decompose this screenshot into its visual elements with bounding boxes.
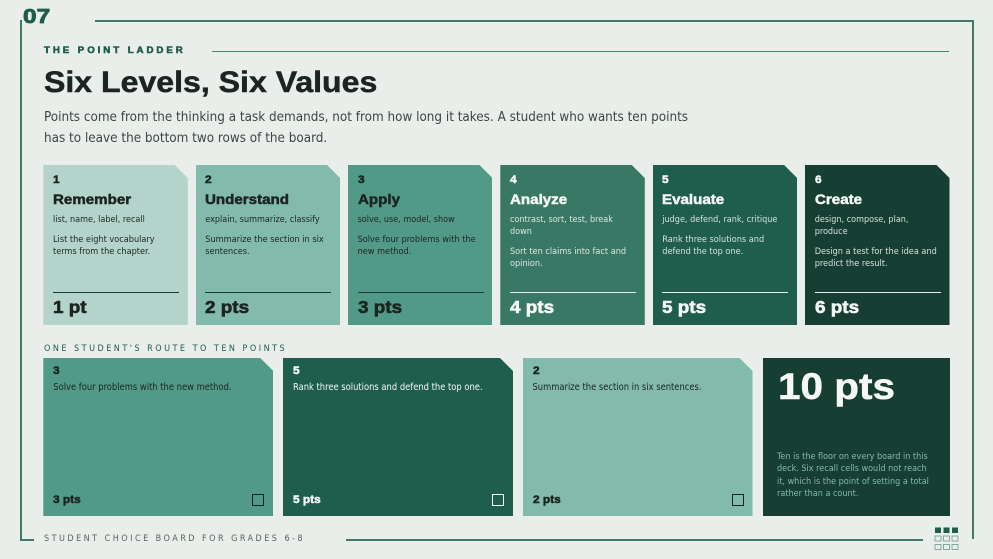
route card: level 2: Summarize the section in six sentences. [532,382,702,393]
panel: level 2 understand: explain, summarize, classify [205,215,320,225]
panel: level 3 apply [348,165,492,325]
route card: level 3: 3 pts [53,494,81,506]
panel: level 2 understand [196,165,340,325]
panel: level 4 analyze: contrast, sort, test, break [510,215,613,225]
panel: level 1 remember: Remember [53,191,131,207]
panel: level 4 analyze: down [510,227,532,237]
panel: level 1 remember: List the eight vocabulary [53,234,155,244]
total note: deck. Six recall cells would not reach [777,464,927,474]
total note: it, which is the point of setting a total [777,477,929,487]
panel: level 4 analyze: 4 pts [510,297,554,317]
total note: Ten is the floor on every board in this [777,452,928,462]
panel: level 1 remember: terms from the chapter. [53,247,150,257]
panel: level 2 understand: Understand [205,191,289,207]
icon: grid [934,528,958,550]
panel: level 6 create: Create [815,191,862,207]
total panel [763,358,950,516]
panel: level 3 apply: 3 [358,174,364,186]
route card: level 5: 5 [293,365,300,377]
total value: 10 pts [778,365,895,407]
route card: level 2: 2 pts [532,494,560,506]
footer text: STUDENT CHOICE BOARD FOR GRADES 6-8 [44,534,305,544]
panel: level 1 remember [43,165,188,325]
section label: ONE STUDENT'S ROUTE TO TEN POINTS [44,344,287,354]
route card: level 5: Rank three solutions and defend the top one. [293,382,483,393]
route card: level 3: Solve four problems with the new method. [53,382,232,393]
page number: 07 [23,6,50,28]
panel: level 4 analyze: opinion. [510,259,543,269]
route card: level 3 [43,358,273,516]
intro text: has to leave the bottom two rows of the board. [44,131,327,146]
panel: level 2 understand: Summarize the section in six [205,234,324,244]
panel: level 4 analyze [500,165,645,325]
route card: level 5: 5 pts [293,494,321,506]
panel: level 2 understand: 2 pts [205,297,249,317]
panel: level 1 remember: 1 pt [53,297,87,317]
route card: level 2: 2 [532,365,539,377]
panel: level 1 remember: list, name, label, recall [53,215,145,225]
panel: level 4 analyze: 4 [510,174,517,186]
panel: level 6 create: 6 pts [815,297,859,317]
total note: rather than a count. [777,489,858,499]
panel: level 6 create: Design a test for the idea and [815,247,937,257]
panel: level 3 apply: 3 pts [358,297,402,317]
panel: level 6 create: design, compose, plan, [815,215,908,225]
route card: level 2 [522,358,752,516]
panel: level 6 create: produce [815,227,848,237]
panel: level 2 understand: 2 [205,174,212,186]
eyebrow: THE POINT LADDER [44,45,186,55]
panel: level 5 evaluate: 5 [662,174,669,186]
panel: level 5 evaluate: Evaluate [662,191,724,207]
panel: level 3 apply: Solve four problems with the [358,234,476,244]
panel: level 5 evaluate: 5 pts [662,297,706,317]
panel: level 4 analyze: Sort ten claims into fact and [510,247,626,257]
title: Six Levels, Six Values [44,66,377,99]
total note [777,452,929,499]
panel: level 3 apply: solve, use, model, show [358,215,455,225]
intro text: Points come from the thinking a task demands, not from how long it takes. A student who wants ten points [44,110,688,125]
panel: level 5 evaluate: Rank three solutions and [662,234,764,244]
panel: level 4 analyze: Analyze [510,191,567,207]
panel: level 6 create [805,165,950,325]
panel: level 3 apply: Apply [358,191,400,207]
panel: level 6 create: 6 [815,174,821,186]
panel: level 5 evaluate: judge, defend, rank, critique [662,215,777,225]
panel: level 3 apply: new method. [358,247,411,257]
panel: level 6 create: predict the result. [815,259,888,269]
intro text [44,110,688,146]
route card: level 5 [283,358,513,516]
panel: level 2 understand: sentences. [205,247,250,257]
panel: level 5 evaluate: defend the top one. [662,247,743,257]
panel: level 5 evaluate [653,165,797,325]
panel: level 1 remember: 1 [53,174,60,186]
route card: level 3: 3 [53,365,60,377]
